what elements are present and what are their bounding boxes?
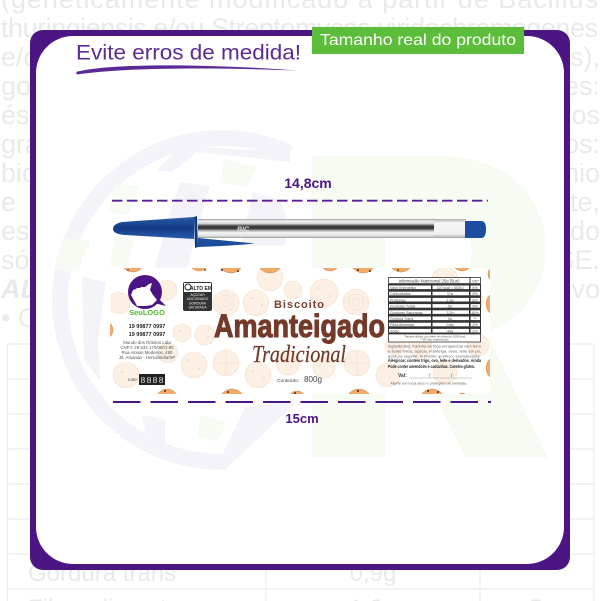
table: nutrition facts: VD* <box>472 280 479 284</box>
background: faded nutrition table <box>8 344 594 601</box>
table: nutrition facts: 5g <box>448 305 452 309</box>
table: nutrition facts: 9% <box>472 305 478 309</box>
table: nutrition facts: ** <box>474 317 477 321</box>
background: faded page text: do <box>570 216 600 246</box>
background: faded page text: es: <box>564 71 600 101</box>
text: ingredients and allergens: Pode conter amendoim e castanhas. Contém glúten. <box>388 364 475 369</box>
background: faded page text: os <box>571 100 600 130</box>
icon: high in warning badge <box>183 282 212 311</box>
text: storage note: Mante em local seco e protegido da umidade. <box>391 382 467 386</box>
icon: high in warning badge: GORDURA <box>189 302 207 306</box>
text: net content <box>277 374 322 384</box>
text: expiry date line: / <box>451 373 453 379</box>
heading: evite erros de medida <box>76 42 301 74</box>
background: faded page text: bio <box>1 158 37 188</box>
pattern: cookies <box>110 268 490 394</box>
background: faded page text: AL <box>0 274 37 304</box>
watermark: green letter R <box>312 156 548 458</box>
icon: high in warning badge: SATURADA <box>188 306 207 310</box>
logo: seu logo <box>128 275 166 317</box>
text: ingredients and allergens <box>388 344 482 369</box>
table: nutrition facts: *Valores diários com base em dieta de 2.000 kcal <box>404 334 465 338</box>
background: faded nutrition table: 0,9g <box>350 560 396 587</box>
background: faded page text: thuringiensis e/ou Streptomyces viridochromogenes <box>1 13 598 43</box>
background: faded page text <box>0 0 600 333</box>
text: batch code: Lote: <box>128 377 138 382</box>
title: biscoito: Biscoito <box>274 299 324 311</box>
text: ingredients and allergens: e ácido fólico, açúcar, manteiga, ovos, leite em pó, <box>388 350 481 354</box>
panel: product label <box>110 268 490 394</box>
table: nutrition facts: 0,6g <box>446 323 454 327</box>
background: faded page text: os: <box>564 129 600 159</box>
text: ingredients and allergens: gordura vegetal, fermento químico, aromatizante. <box>388 354 481 358</box>
table: nutrition facts: Valor Energético <box>390 286 416 290</box>
measurement: top label 14,8cm: 14,8cm <box>284 175 332 191</box>
background: faded page text: nio <box>564 158 600 188</box>
title: tradicional: Tradicional <box>252 342 346 368</box>
table: nutrition facts: 44g <box>447 329 453 333</box>
background: faded page text: vo <box>571 274 600 304</box>
text: phone numbers <box>129 324 165 338</box>
background: faded page text: SE. <box>556 245 600 275</box>
text: company address: Rua Aloisio Medeiros, 490 <box>121 350 173 355</box>
table: nutrition facts: Fibra Alimentar <box>390 323 415 327</box>
text: company address: Jd. Amanda - Hortolândia/SP <box>119 355 175 360</box>
text: phone numbers: 19 99877 0997 <box>129 324 165 330</box>
table: nutrition facts: 6% <box>472 286 478 290</box>
panel: white card <box>36 36 564 564</box>
table: nutrition facts: 16% <box>471 311 479 315</box>
text: ingredients and allergens: Alérgicos: contém trigo, ovo, leite e derivados. Ainda <box>388 358 482 363</box>
text: expiry date line: / <box>429 373 431 379</box>
text: ingredients and allergens: Ingredientes: Farinha de trigo enriquecida com ferro <box>388 344 481 348</box>
table: nutrition facts: **VD não estabelecido <box>420 338 449 342</box>
table: nutrition facts: Sódio <box>390 329 399 333</box>
table: nutrition facts: 6% <box>472 298 478 302</box>
illustration: blue pen <box>113 216 486 248</box>
text: net content: Conteúdo: <box>277 378 299 384</box>
background: faded page text: gra <box>1 129 41 159</box>
background: faded page text: es <box>1 216 30 246</box>
measurement: bottom label 15cm: 15cm <box>285 411 319 426</box>
text: phone numbers: 19 99877 0997 <box>129 332 165 338</box>
background: faded page text: s), <box>570 42 600 72</box>
text: company address: CNPJ: 28.534.170/0001-80 <box>120 345 174 350</box>
background: faded page text: te, <box>570 187 600 217</box>
text: company address: Mundo dos Rótulos Ltda <box>123 340 171 345</box>
table: nutrition facts: Proteínas <box>390 298 406 302</box>
text: company address <box>119 340 175 360</box>
table: nutrition facts: Gorduras Saturadas <box>390 311 423 315</box>
title: amanteigado: Amanteigado <box>214 308 385 344</box>
text: expiry date line <box>398 373 472 379</box>
watermark: green logo squares <box>56 158 257 442</box>
badge: tamanho real do produto <box>312 27 524 54</box>
background: faded page text: e <box>1 187 16 217</box>
table: nutrition facts <box>388 277 481 342</box>
text: batch code: 8888 <box>140 375 164 385</box>
background: faded page text: só <box>1 245 30 275</box>
measurement: top dashed line <box>112 200 488 202</box>
table: nutrition facts: Gordura Trans <box>390 317 413 321</box>
illustration: blue pen: BIC <box>237 226 250 234</box>
logo: seu logo: SeuLOGO <box>129 308 165 317</box>
text: expiry date line: Val: <box>398 373 407 379</box>
measurement: bottom dashed line <box>113 401 491 403</box>
icon: high in warning badge: AÇÚCAR <box>190 292 205 297</box>
table: nutrition facts: Informação Nutricional 25g (5un) <box>399 278 460 284</box>
table: nutrition facts: 2% <box>472 329 478 333</box>
heading: evite erros de medida: Evite erros de medida! <box>76 42 301 64</box>
background: faded nutrition table: Gordura trans <box>28 560 176 587</box>
icon: high in warning badge: ADICIONADO <box>187 297 209 301</box>
table: nutrition facts: 3,2g <box>446 311 454 315</box>
text: net content: 800g <box>304 374 322 384</box>
table: nutrition facts: 5% <box>472 292 478 296</box>
table: nutrition facts: 17g <box>447 292 453 296</box>
table: nutrition facts: Gorduras Totais <box>390 305 416 309</box>
background: faded page text: go <box>1 71 31 101</box>
background: faded page text: e/c <box>1 42 37 72</box>
table: nutrition facts: 0g <box>448 317 452 321</box>
table: nutrition facts: 1,9g <box>446 298 454 302</box>
text: batch code <box>128 374 165 385</box>
badge: tamanho real do produto: Tamanho real do produto <box>320 32 516 49</box>
table: nutrition facts: 120 kcal = 502kJ <box>436 286 464 290</box>
background: faded page text: és <box>1 100 30 130</box>
background: faded page text: • C <box>1 303 37 333</box>
table: nutrition facts: Carboidratos <box>390 292 411 296</box>
table: nutrition facts: 2% <box>472 323 478 327</box>
watermark: faded globe logo <box>60 138 299 469</box>
icon: high in warning badge: ALTO EM <box>190 286 212 292</box>
